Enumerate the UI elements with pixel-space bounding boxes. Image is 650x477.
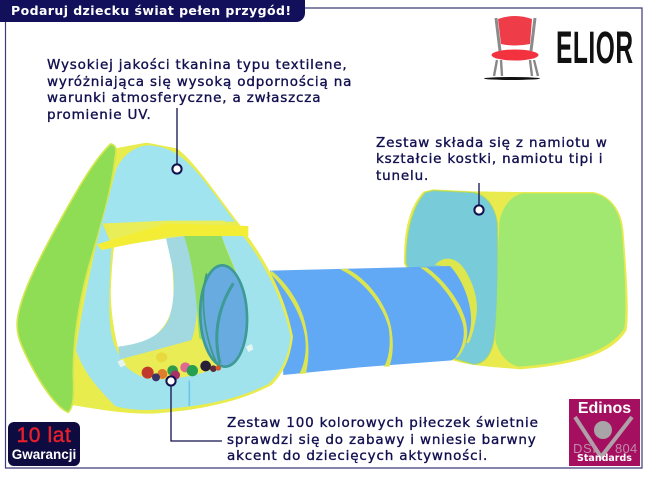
badge standards: Standards <box>577 453 632 464</box>
tent body <box>72 143 293 414</box>
yellow tube <box>97 223 248 250</box>
balls <box>142 352 221 381</box>
text block: set contents <box>376 134 608 184</box>
text block: balls: Zestaw 100 kolorowych piłeczek świetnie <box>227 415 539 431</box>
mesh round door <box>199 265 249 367</box>
text block: fabric: wyróżniająca się wysoką odpornością na <box>47 74 352 90</box>
text block: set contents: kształcie kostki, namiotu tipi i <box>376 151 603 167</box>
logo: wordmark: ELIOR <box>556 22 634 73</box>
seam and corner tabs <box>187 381 192 406</box>
text block: fabric <box>47 57 352 123</box>
window opening <box>111 238 173 348</box>
title banner: Podaruj dziecku świat pełen przygód! <box>11 3 291 18</box>
green side panel <box>17 144 116 412</box>
text block: balls <box>227 415 539 464</box>
marker: cube tent <box>474 183 484 215</box>
front lower panel <box>76 222 291 410</box>
title banner <box>0 0 305 22</box>
text block: balls: sprawdzi się do zabawy i wniesie barwny <box>227 432 537 448</box>
marker: balls <box>166 376 222 441</box>
badge code left: DSI <box>573 441 596 456</box>
text block: fabric: promienie UV. <box>47 107 152 123</box>
text block: set contents: Zestaw składa się z namiotu w <box>376 134 608 150</box>
triangular tent <box>17 143 293 414</box>
cube tent <box>404 189 628 369</box>
text block: set contents: tunelu. <box>376 168 429 184</box>
marker: top of triangular tent <box>172 108 182 174</box>
text block: balls: akcent do dziecięcych aktywności. <box>227 448 488 464</box>
badge: Edinos DSI 804 Standards <box>569 399 640 466</box>
badge emblem <box>573 416 634 460</box>
upper blue panel <box>102 145 235 223</box>
badge name: Edinos <box>578 400 631 417</box>
badge years: 10 lat <box>16 424 71 447</box>
badge code right: 804 <box>615 441 638 456</box>
inner mesh back wall <box>118 236 197 360</box>
badge: 10 years warranty <box>8 422 80 466</box>
logo: chair icon <box>484 16 540 80</box>
window yellow awning <box>108 221 225 247</box>
badge warranty label: Gwarancji <box>12 447 76 462</box>
floor <box>120 338 230 379</box>
text block: fabric: Wysokiej jakości tkanina typu textilene, <box>47 57 348 73</box>
text block: fabric: warunki atmosferyczne, a zwłaszcza <box>47 90 321 106</box>
tunnel <box>270 266 471 375</box>
